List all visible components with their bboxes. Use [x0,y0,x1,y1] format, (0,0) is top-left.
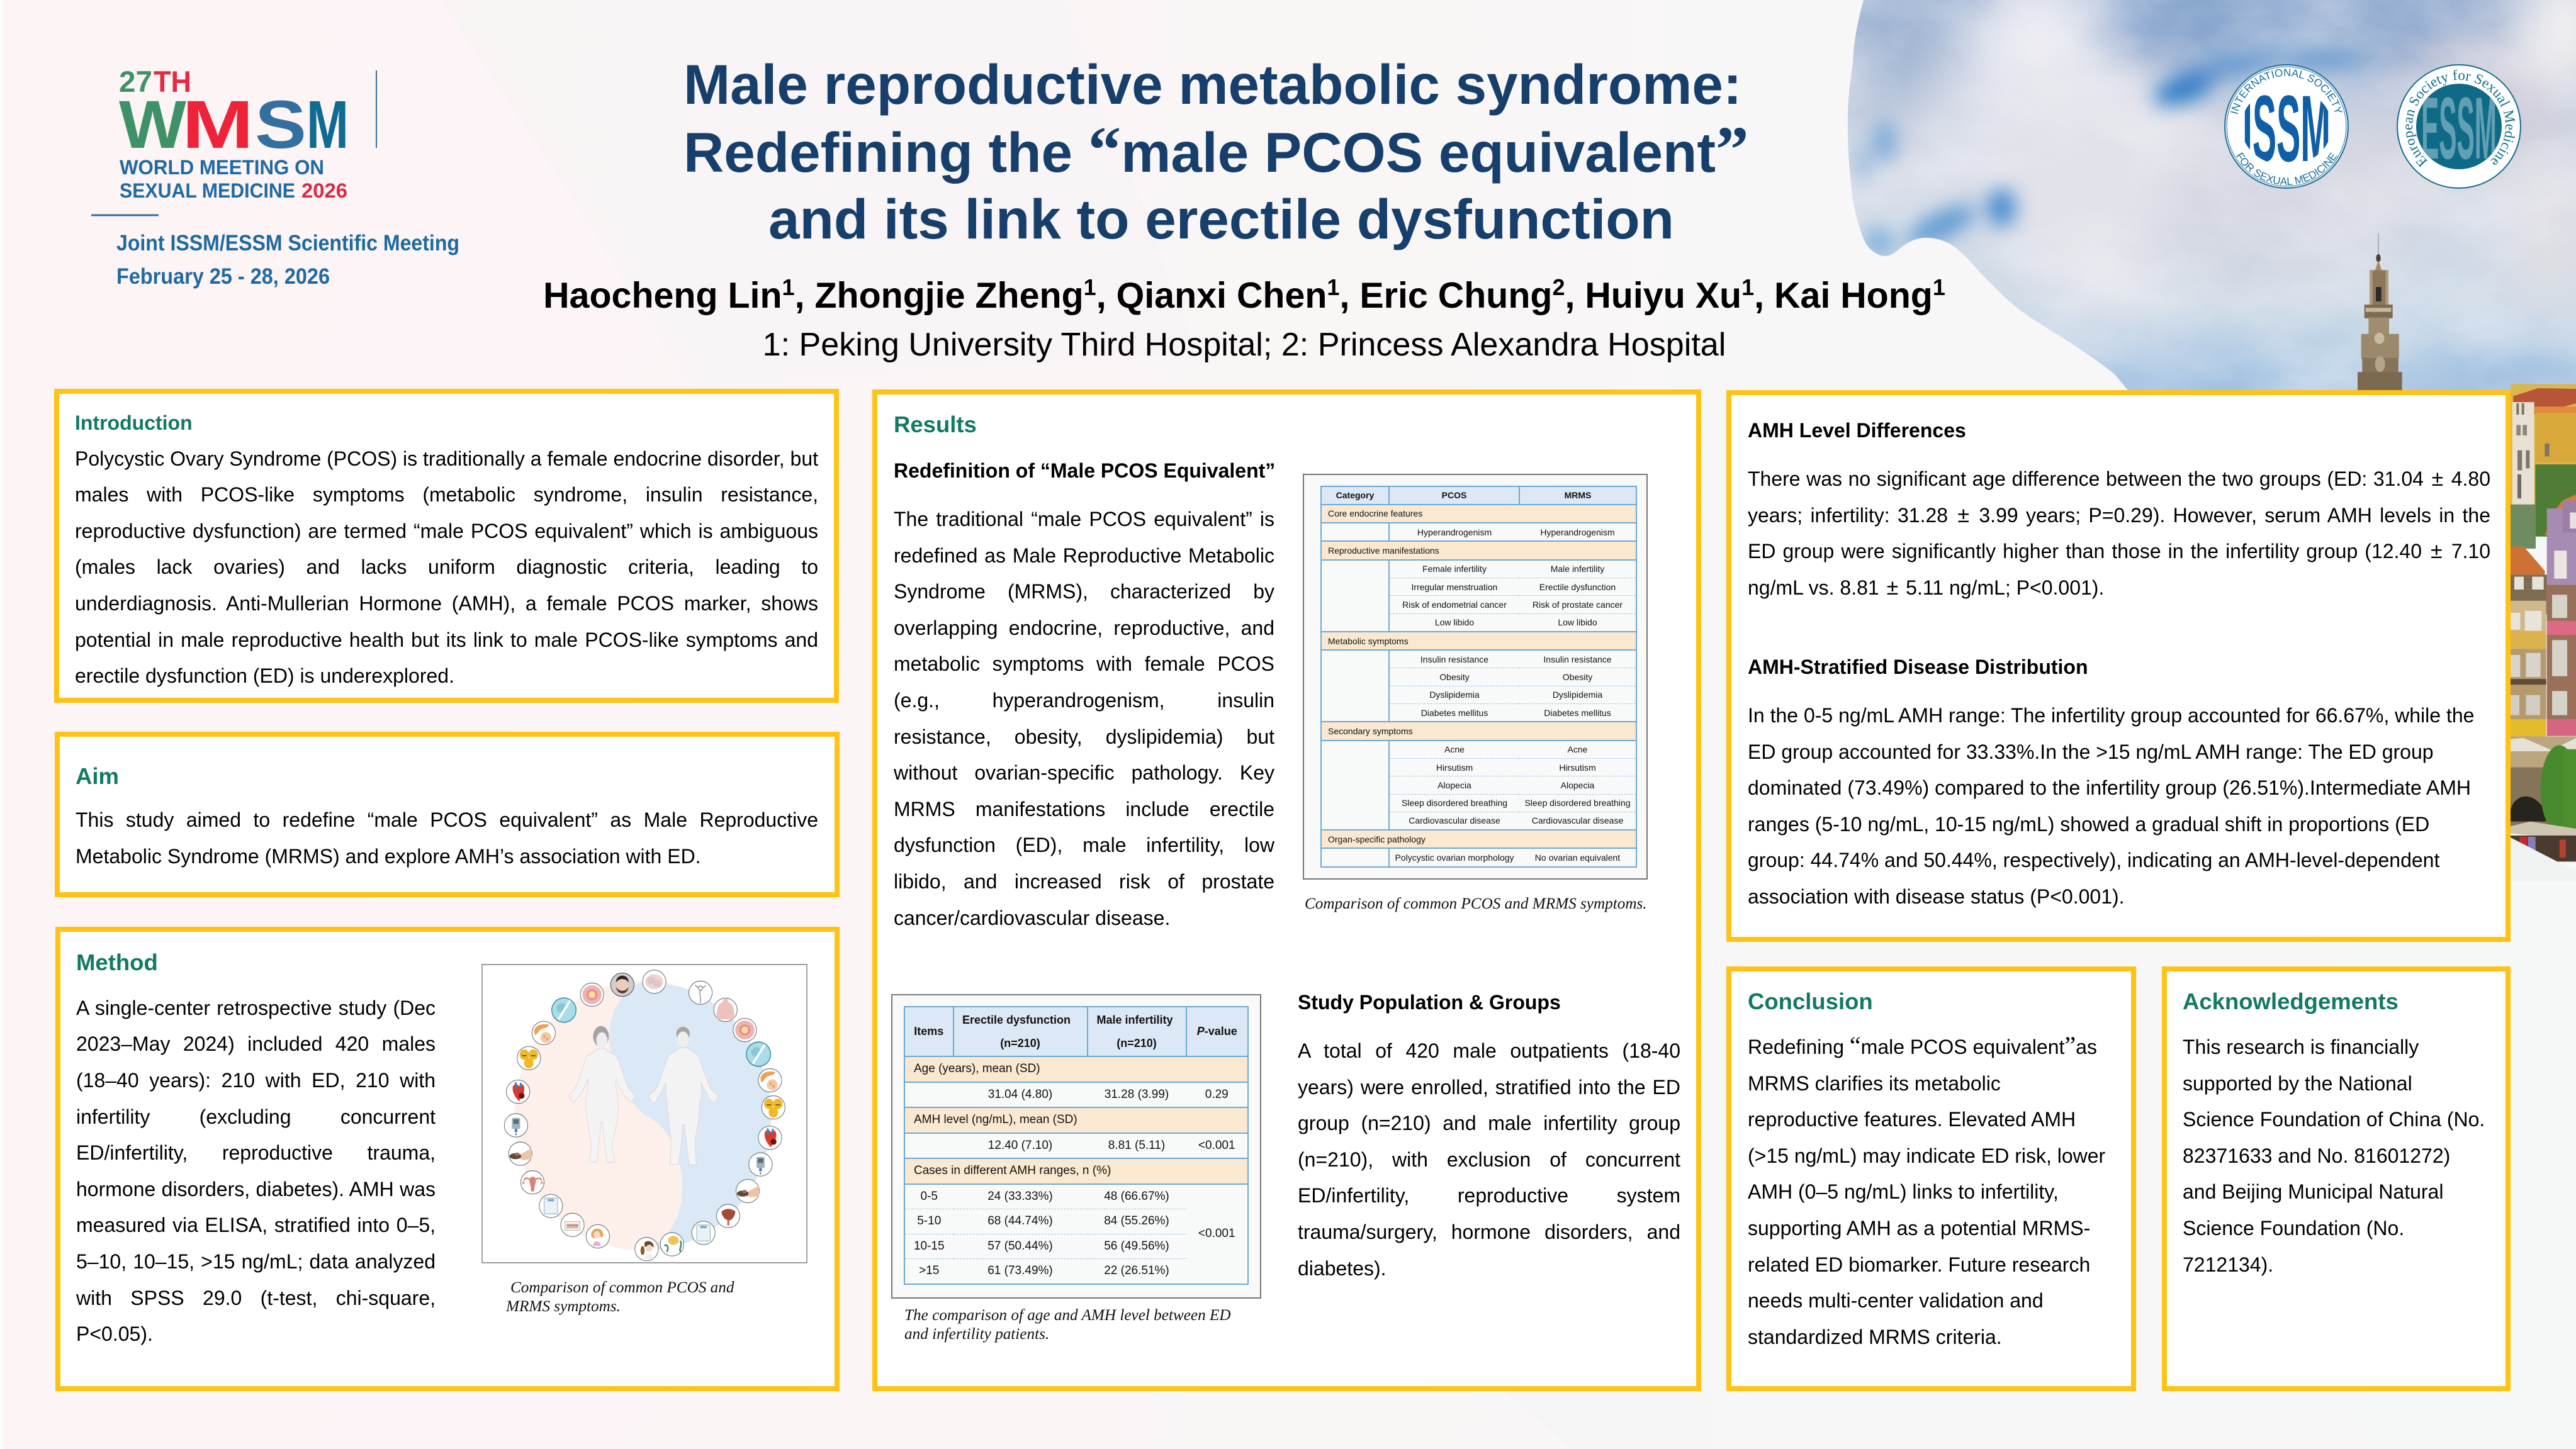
text: redefinition: cancer/cardiovascular disease. [894,907,1170,929]
text: study population: trauma/surgery, hormone disorders, and [1298,1221,1680,1243]
text: AMH stratified: ED group accounted for 33.33%.In the >15 ng/mL AMH range: The ED group [1748,741,2434,763]
table: age and AMH comparison: Male infertility [1096,1013,1173,1026]
text: AMH stratified: group: 44.74% and 50.44%, respectively), indicating an AMH-level-dependent [1748,849,2439,871]
table: age and AMH comparison: >15 [919,1264,939,1277]
table: PCOS vs MRMS symptoms: Low libido [1435,617,1474,627]
text: method: A single-center retrospective study (Dec [76,997,436,1019]
table: PCOS vs MRMS symptoms: Insulin resistance [1420,654,1488,664]
text: study population: ED/infertility, reproductive system [1298,1184,1680,1207]
icon: acne [733,1018,756,1042]
table: PCOS vs MRMS symptoms: Risk of prostate cancer [1533,600,1623,610]
text: AMH level differences: ng/mL vs. 8.81 ± 5.11 ng/mL; P<0.001). [1748,576,2104,600]
table: age and AMH comparison: 10-15 [914,1239,945,1253]
meeting name: Joint ISSM/ESSM Scientific Meeting [116,231,459,255]
table: age and AMH comparison: (n=210) [1116,1037,1157,1049]
figure: PCOS and MRMS symptom circle [481,964,807,1263]
ISSM logo: INTERNATIONAL SOCIETY [2230,69,2343,115]
figure caption: Comparison of common PCOS and [510,1279,734,1296]
text: redefinition: without ovarian-specific pathology. Key [894,761,1274,784]
table: PCOS vs MRMS symptoms: Sleep disordered breathing [1402,798,1507,808]
table: PCOS vs MRMS symptoms: Dyslipidemia [1553,690,1602,700]
text: acknowledgements: and Beijing Municipal Natural [2183,1180,2443,1203]
table: PCOS vs MRMS symptoms: Alopecia [1437,780,1471,790]
text: acknowledgements [2183,1029,2485,1283]
table: PCOS vs MRMS symptoms: Hyperandrogenism [1540,527,1615,537]
table: age and AMH comparison: 5-10 [917,1214,941,1228]
table: age and AMH comparison: Age (years), mean (SD) [914,1062,1040,1075]
icon: boy [635,1238,658,1261]
text: redefinition: (e.g., hyperandrogenism, insulin [894,689,1274,712]
table: PCOS vs MRMS symptoms: Secondary symptoms [1328,726,1413,736]
table: PCOS vs MRMS symptoms: Sleep disordered breathing [1524,798,1631,808]
text: introduction: Polycystic Ovary Syndrome (PCOS) is traditionally a female endocrine disorder, but [75,447,818,470]
text: redefinition: The traditional “male PCOS equivalent” is [894,508,1274,530]
subheading: redefinition: Redefinition of “Male PCOS Equivalent” [894,459,1275,482]
text: conclusion: standardized MRMS criteria. [1748,1326,2002,1348]
table: age and AMH comparison: 31.04 (4.80) [988,1088,1052,1101]
text: AMH level differences: years; infertility: 31.28 ± 3.99 years; P=0.29). However, serum AMH levels in the [1748,503,2490,527]
text: acknowledgements: 82371633 and No. 81601272) [2183,1144,2450,1167]
heading: results: Results [894,411,977,437]
icon: sleep [509,1142,532,1165]
table: PCOS vs MRMS symptoms: Cardiovascular disease [1409,815,1500,825]
icon: mood [762,1096,785,1119]
table: PCOS vs MRMS symptoms: Irregular menstruation [1412,582,1497,592]
text: acknowledgements: 7212134). [2183,1253,2273,1276]
text: method: hormone disorders, diabetes). AMH was [76,1178,436,1200]
table: PCOS vs MRMS symptoms: No ovarian equivalent [1535,853,1620,863]
text: redefinition: dysfunction (ED), male infertility, low [894,834,1274,856]
text: study population: A total of 420 male outpatients (18-40 [1298,1039,1680,1062]
title: Male reproductive metabolic syndrome: [683,53,1742,116]
text: conclusion: MRMS clarifies its metabolic [1748,1072,2001,1095]
table: age and AMH comparison: 8.81 (5.11) [1108,1139,1165,1152]
icon: alopecia [552,998,576,1022]
table: PCOS vs MRMS symptoms: Alopecia [1561,780,1594,790]
text: conclusion: Redefining “male PCOS equivalent”as [1748,1031,2097,1060]
text: introduction: reproductive dysfunction) are termed “male PCOS equivalent” which is ambiguous [75,520,818,542]
table: PCOS vs MRMS symptoms: Cardiovascular disease [1532,815,1623,825]
text: redefinition: overlapping endocrine, reproductive, and [894,617,1274,639]
text: redefinition: MRMS manifestations include erectile [894,798,1274,820]
table: age and AMH comparison: 56 (49.56%) [1104,1239,1169,1253]
text: study population: diabetes). [1298,1257,1386,1280]
logo: World Meeting on Sexual Medicine [120,156,347,202]
figure caption [506,1279,734,1315]
table: PCOS vs MRMS symptoms: Hirsutism [1436,763,1473,773]
meeting date: February 25 - 28, 2026 [116,264,330,289]
logo: 27TH [119,65,191,98]
panel: aim [55,732,840,897]
text: conclusion [1748,1029,2105,1355]
logo: World Meeting on Sexual Medicine: 2026 [301,179,347,202]
table: age and AMH comparison: 57 (50.44%) [987,1239,1053,1253]
icon: prostate [716,1204,740,1228]
table: PCOS vs MRMS symptoms: PCOS [1442,490,1466,500]
panel: AMH findings [1726,390,2511,942]
table: PCOS vs MRMS symptoms: Erectile dysfunction [1539,582,1616,592]
table: age and AMH comparison [891,994,1261,1299]
panel: method [55,927,840,1391]
table: PCOS vs MRMS symptoms: Male infertility [1551,564,1604,574]
heading: aim: Aim [76,763,119,789]
table: age and AMH comparison: (n=210) [1000,1037,1040,1049]
authors: Haocheng Lin1, Zhongjie Zheng1, Qianxi Chen1, Eric Chung2, Huiyu Xu1, Kai Hong1 [543,274,1945,316]
icon: pancreas [758,1068,782,1092]
subheading: study population: Study Population & Groups [1298,991,1561,1014]
caption: age and AMH table: and infertility patients. [904,1326,1049,1343]
affiliations: 1: Peking University Third Hospital; 2: Princess Alexandra Hospital [763,327,1726,363]
icon: heart [758,1126,782,1150]
heading: acknowledgements: Acknowledgements [2183,988,2399,1014]
text: conclusion: related ED biomarker. Future research [1748,1253,2090,1276]
icon: alopecia [746,1042,771,1066]
title [683,53,1748,250]
logo: World Meeting on Sexual Medicine: SEXUAL MEDICINE [120,179,295,202]
icon: pancreas [532,1021,555,1044]
text: acknowledgements: Science Foundation (No. [2183,1217,2404,1239]
text: introduction: underdiagnosis. Anti-Mullerian Hormone (AMH), a female PCOS marker, shows [75,592,818,615]
heading: conclusion: Conclusion [1748,988,1873,1014]
text: conclusion: AMH (0–5 ng/mL) links to infertility, [1748,1180,2059,1203]
text: AMH level differences [1748,467,2490,600]
text: AMH stratified: dominated (73.49%) compared to the infertility group (26.51%).Intermediate AMH [1748,776,2471,799]
text: method [76,997,436,1345]
text: conclusion: supporting AMH as a potential MRMS- [1748,1217,2090,1239]
icon: girl [586,1224,609,1248]
icon: scale [539,1194,563,1217]
text: acknowledgements: supported by the National [2183,1072,2412,1095]
text: conclusion: (>15 ng/mL) may indicate ED risk, lower [1748,1144,2105,1167]
table: PCOS vs MRMS symptoms: Female infertility [1422,564,1487,574]
table: PCOS vs MRMS symptoms: MRMS [1565,490,1591,500]
subheading: AMH level differences: AMH Level Differences [1748,419,1966,442]
logo: WMSM: M [307,86,349,162]
ISSM logo [2224,64,2349,189]
table: PCOS vs MRMS symptoms: Reproductive manifestations [1328,545,1439,556]
title: and its link to erectile dysfunction [768,187,1674,250]
text: redefinition [894,508,1274,929]
yin-yang backdrop [514,982,771,1250]
male body [649,1027,718,1165]
logo: 27TH: TH [154,65,191,98]
caption: symptoms table: Comparison of common PCOS and MRMS symptoms. [1305,895,1647,912]
icon: acne [580,983,604,1006]
title: Redefining the “male PCOS equivalent” [683,113,1748,186]
text: study population: (n=210), with exclusion of concurrent [1298,1148,1680,1171]
text: AMH level differences: There was no significant age difference between the two groups (ED: 31.04 ± 4.80 [1748,467,2490,491]
table: age and AMH comparison: 68 (44.74%) [987,1214,1053,1228]
text: acknowledgements: Science Foundation of China (No. [2183,1108,2485,1131]
logo: WMSM: M [182,86,254,162]
text: AMH stratified: ranges (5-10 ng/mL, 10-15 ng/mL) showed a gradual shift in proportions (ED [1748,813,2429,836]
table: age and AMH comparison: Items [914,1025,943,1038]
table: PCOS vs MRMS symptoms: Diabetes mellitus [1421,708,1488,718]
table: PCOS vs MRMS symptoms: Hyperandrogenism [1417,527,1492,537]
icon: back rash [714,998,737,1022]
caption: age and AMH table [904,1307,1231,1343]
icon: mood [517,1046,541,1070]
text: study population: group (n=210) and male infertility group [1298,1112,1680,1134]
icon: glucometer [504,1114,527,1137]
text: introduction: (males lack ovaries) and lacks uniform diagnostic criteria, leading to [75,556,818,578]
icon: neuron [689,981,712,1004]
icon: glucometer [749,1153,772,1176]
text: method: infertility (excluding concurrent [76,1105,436,1128]
subheading: AMH stratified: AMH-Stratified Disease Distribution [1748,656,2088,678]
text: redefinition: Syndrome (MRMS), characterized by [894,580,1274,603]
text: AMH stratified: In the 0-5 ng/mL AMH range: The infertility group accounted for 66.67%, while the [1748,704,2474,727]
icon: cell [660,1233,683,1256]
table: PCOS vs MRMS symptoms: Diabetes mellitus [1544,708,1611,718]
icon: uterus [520,1171,544,1194]
icon: brain [643,970,666,993]
text: aim [76,808,818,868]
text: method: 2023–May 2024) included 420 males [76,1032,436,1055]
table: PCOS vs MRMS symptoms: Acne [1444,744,1465,754]
text: study population: years) were enrolled, stratified into the ED [1298,1076,1680,1099]
table: PCOS vs MRMS symptoms: Category [1336,490,1374,500]
icon: calendar [561,1213,584,1236]
table: PCOS vs MRMS symptoms [1303,473,1648,880]
table: age and AMH comparison: 24 (33.33%) [987,1190,1053,1203]
panel: results [872,389,1701,1391]
text: AMH stratified [1748,698,2497,915]
table: age and AMH comparison: 84 (55.26%) [1104,1214,1169,1228]
table: age and AMH comparison: 61 (73.49%) [987,1264,1053,1277]
ISSM logo: FOR SEXUAL MEDICINE [2236,152,2337,185]
table: PCOS vs MRMS symptoms: Insulin resistance [1543,654,1612,664]
table: age and AMH comparison: Cases in different AMH ranges, n (%) [914,1164,1111,1177]
table: PCOS vs MRMS symptoms: Organ-specific pathology [1328,834,1426,844]
table: age and AMH comparison: 48 (66.67%) [1104,1190,1169,1203]
table: age and AMH comparison: 0.29 [1205,1088,1229,1101]
text: AMH level differences: ED group were significantly higher than those in the infertility group (12.40 ± 7.10 [1748,539,2490,563]
table: age and AMH comparison: <0.001 [1198,1139,1235,1152]
table: age and AMH comparison: 22 (26.51%) [1104,1264,1169,1277]
text: introduction: males with PCOS-like symptoms (metabolic syndrome, insulin resistance, [75,483,818,506]
text: method: 5–10, 10–15, >15 ng/mL; data analyzed [76,1250,436,1273]
figure caption: MRMS symptoms. [506,1298,621,1315]
table: PCOS vs MRMS symptoms: Risk of endometrial cancer [1402,600,1507,610]
table: PCOS vs MRMS symptoms: Core endocrine features [1328,508,1422,518]
text: introduction: erectile dysfunction (ED) is underexplored. [75,664,454,687]
icon: heart [507,1080,530,1104]
heading: method: Method [76,949,158,975]
icon: sleep [736,1179,760,1203]
ESSM logo: European Society for Sexual Medicine [2405,69,2515,167]
table: PCOS vs MRMS symptoms: Obesity [1439,672,1470,682]
table: age and AMH comparison: P-value [1197,1025,1237,1038]
table: age and AMH comparison: 0-5 [921,1190,938,1203]
icon: beard face [610,973,634,997]
table: age and AMH comparison: 31.28 (3.99) [1105,1088,1169,1101]
text: aim: This study aimed to redefine “male PCOS equivalent” as Male Reproductive [76,808,818,831]
text: conclusion: reproductive features. Elevated AMH [1748,1108,2076,1131]
heading: introduction: Introduction [75,411,193,434]
logo: WMSM: S [255,86,307,162]
logo: 27TH: 27 [119,65,152,98]
conference logo [91,65,459,289]
table: age and AMH comparison: AMH level (ng/mL), mean (SD) [914,1113,1077,1126]
table: PCOS vs MRMS symptoms: Metabolic symptoms [1328,636,1409,646]
text: aim: Metabolic Syndrome (MRMS) and explore AMH’s association with ED. [76,845,701,868]
text: method: (18–40 years): 210 with ED, 210 with [76,1069,436,1092]
text: acknowledgements: This research is financially [2183,1036,2419,1058]
text: conclusion: needs multi-center validation and [1748,1289,2044,1312]
page background with sky and city photo [1848,0,2576,881]
table: PCOS vs MRMS symptoms: Polycystic ovarian morphology [1395,853,1514,863]
text: study population [1298,1039,1680,1280]
text: method: P<0.05). [76,1323,153,1345]
text: redefinition: redefined as Male Reproductive Metabolic [894,544,1274,567]
panel: introduction [54,389,839,703]
text: introduction: potential in male reproductive health but its link to male PCOS-like symptoms and [75,629,818,651]
table: PCOS vs MRMS symptoms: Obesity [1563,672,1592,682]
table: PCOS vs MRMS symptoms: Acne [1568,744,1587,754]
city photo and clock tower [2358,233,2576,862]
panel: conclusion [1726,966,2136,1391]
table: age and AMH comparison: <0.001 [1198,1227,1235,1240]
logo: World Meeting on Sexual Medicine: WORLD MEETING ON [120,156,324,179]
text: redefinition: libido, and increased risk of prostate [894,870,1274,893]
text: introduction [75,447,818,687]
text: method: with SPSS 29.0 (t-test, chi-square, [76,1287,436,1309]
table: PCOS vs MRMS symptoms: Hirsutism [1559,763,1596,773]
table: age and AMH comparison: 12.40 (7.10) [988,1139,1052,1152]
icon: scale [692,1221,715,1245]
text: redefinition: resistance, obesity, dyslipidemia) but [894,725,1274,748]
table: PCOS vs MRMS symptoms: Low libido [1558,617,1597,627]
text: method: measured via ELISA, stratified into 0–5, [76,1214,436,1236]
female body [569,1026,635,1163]
caption: age and AMH table: The comparison of age and AMH level between ED [904,1307,1231,1324]
logo: WMSM [119,86,349,162]
table: PCOS vs MRMS symptoms: Dyslipidemia [1429,690,1480,700]
text: redefinition: metabolic symptoms with female PCOS [894,652,1274,675]
text: method: ED/infertility, reproductive trauma, [76,1141,436,1164]
text: AMH stratified: association with disease status (P<0.001). [1748,885,2125,908]
panel: acknowledgements [2162,966,2511,1391]
table: age and AMH comparison: Erectile dysfunction [962,1013,1071,1026]
logo: WMSM: W [119,86,186,162]
